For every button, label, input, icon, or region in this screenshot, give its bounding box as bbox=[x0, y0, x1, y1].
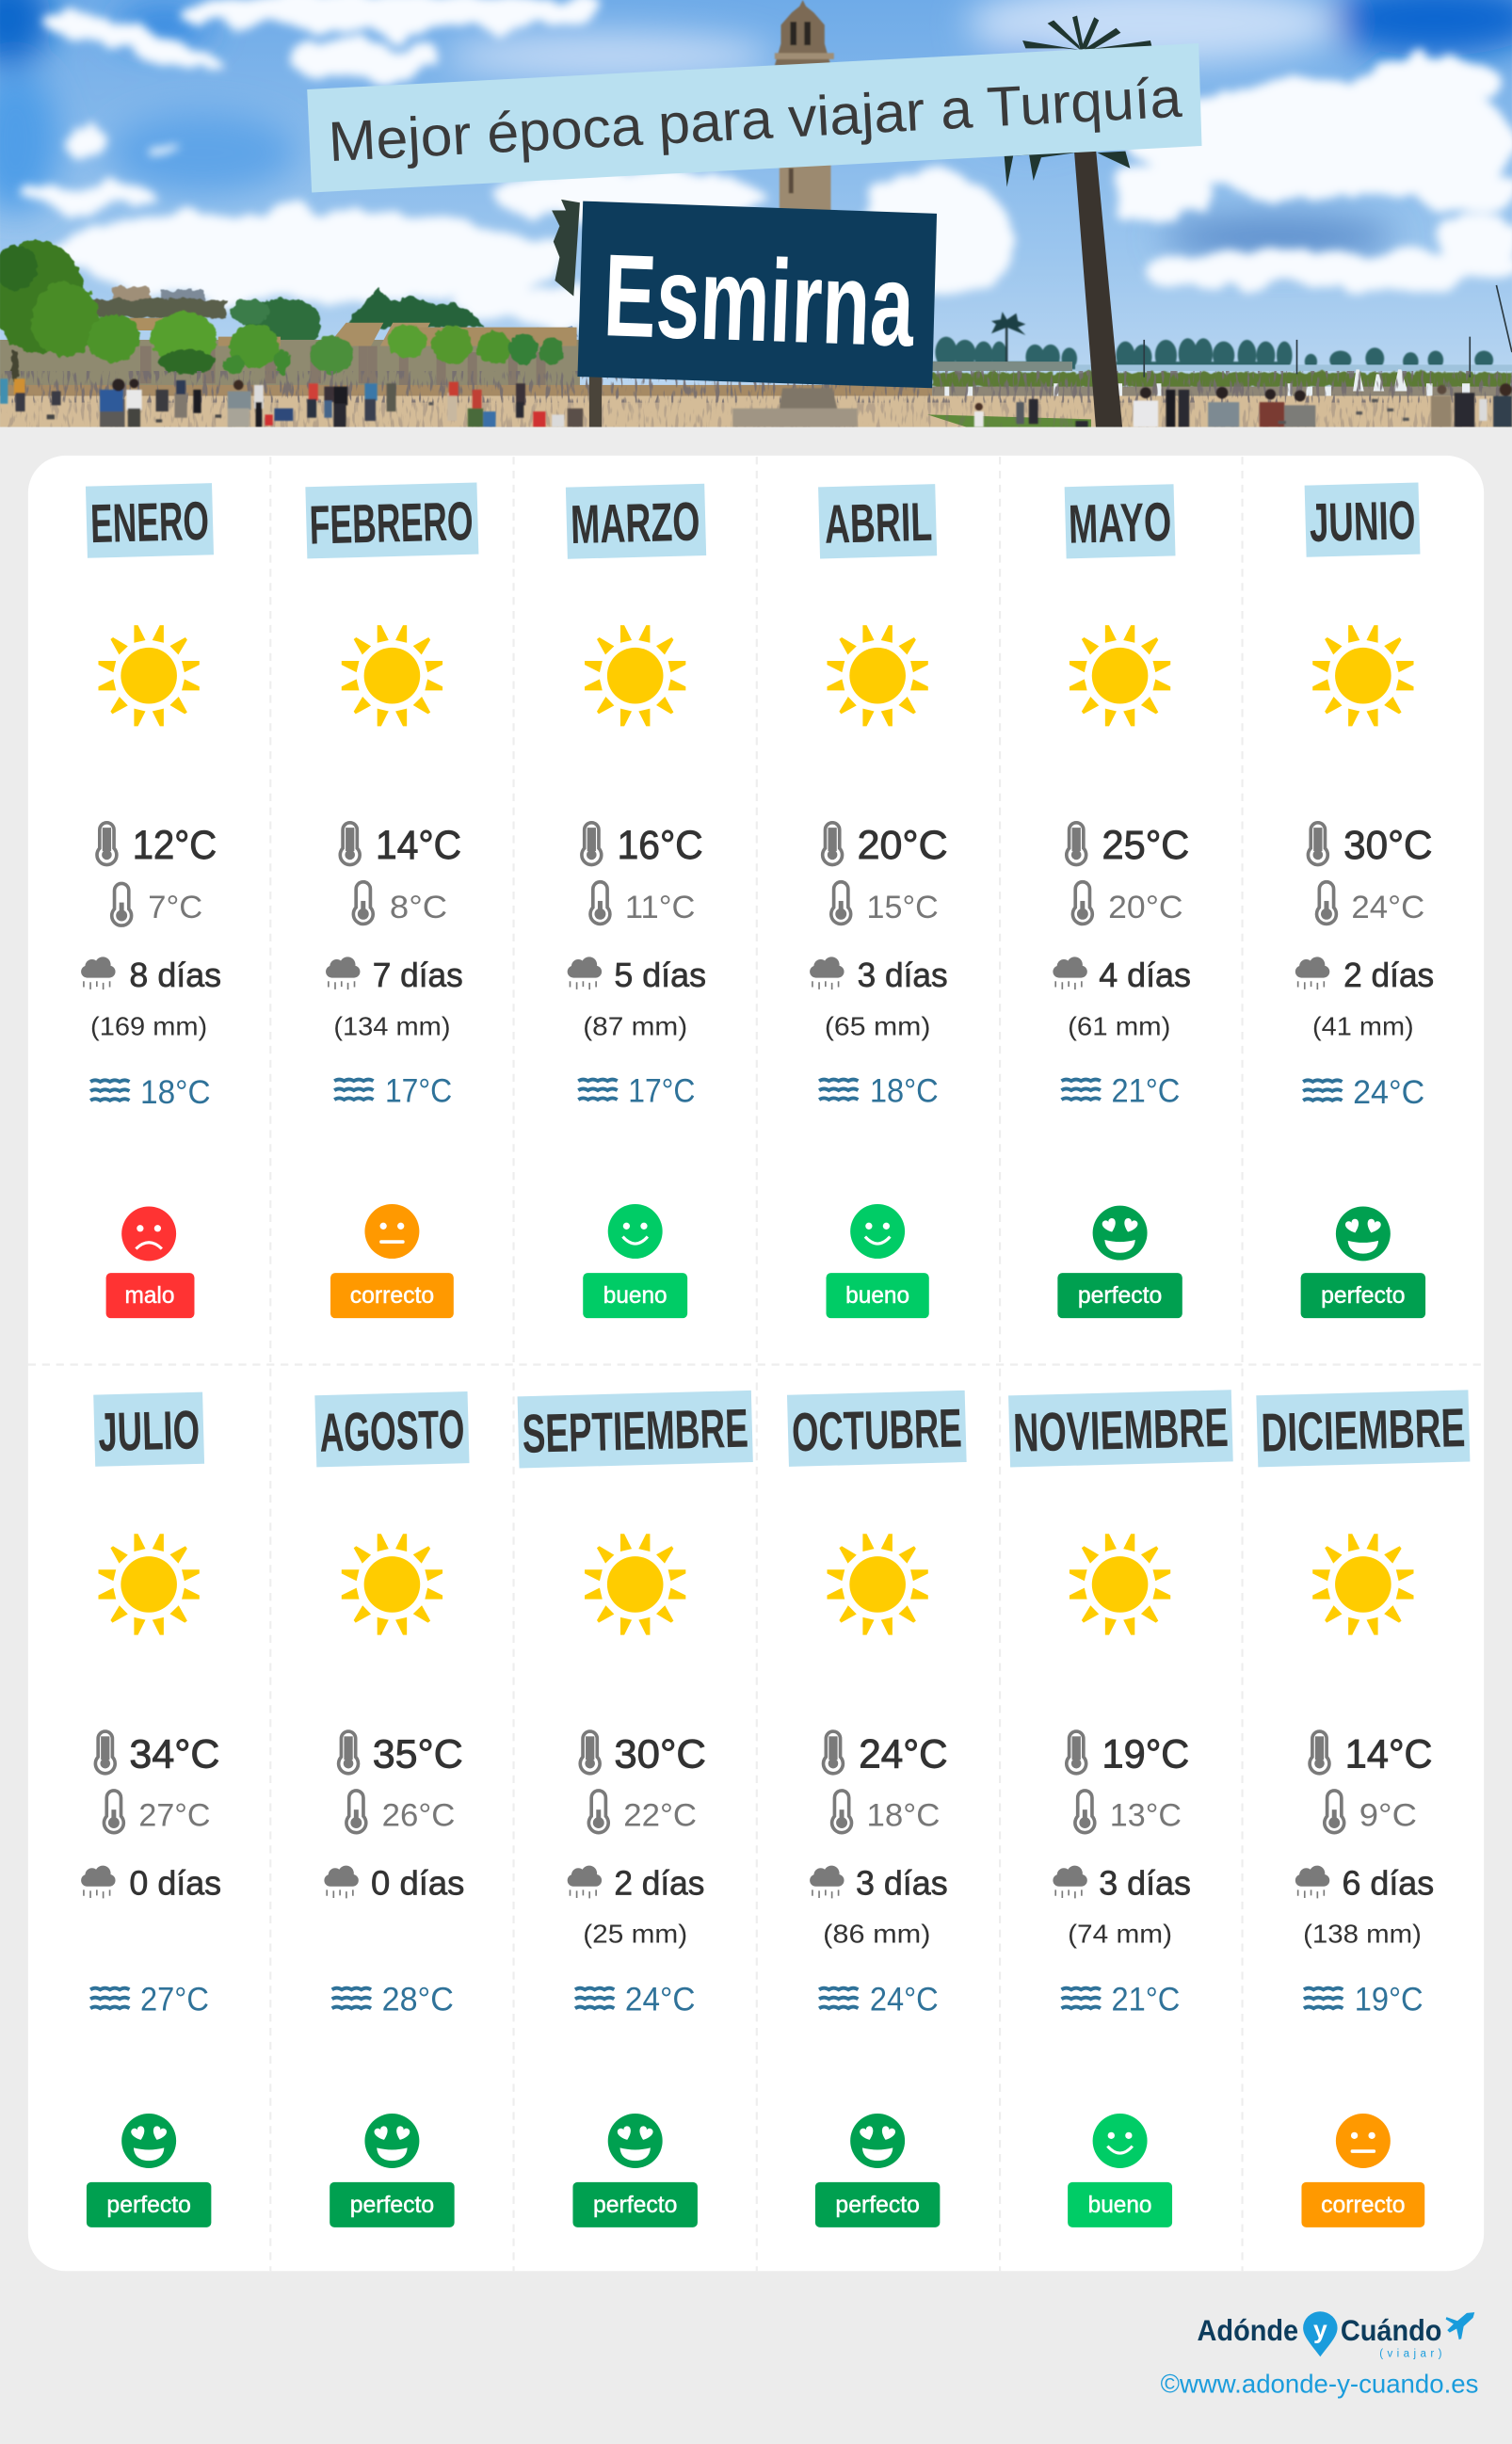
column: noviembre bbox=[1008, 1390, 1233, 2227]
rating: correcto: correcto bbox=[1321, 2193, 1406, 2218]
distant mountains bbox=[537, 326, 578, 337]
sea temperature bbox=[334, 1074, 452, 1110]
icon: sun bbox=[98, 1534, 200, 1635]
rating: correcto: correcto bbox=[350, 1283, 434, 1309]
column: octubre bbox=[787, 1391, 967, 2227]
sea temperature: 24°C bbox=[625, 1983, 695, 2018]
city ribbon bbox=[577, 201, 937, 388]
high temperature: 14°C bbox=[376, 823, 461, 867]
sea temperature bbox=[578, 1074, 695, 1110]
rating: perfecto bbox=[330, 2114, 455, 2227]
rating: bueno bbox=[827, 1204, 929, 1318]
sea temperature: 19°C bbox=[1355, 1983, 1424, 2018]
lamp posts bbox=[1144, 285, 1512, 378]
rainfall: (25 mm) bbox=[583, 1920, 687, 1949]
low temperature bbox=[1072, 882, 1183, 925]
rainfall: (86 mm) bbox=[823, 1920, 930, 1949]
low temperature: 7°C bbox=[148, 890, 202, 925]
column: abril bbox=[810, 484, 948, 1318]
logo: Adónde y Cuándo: Adónde bbox=[1198, 2314, 1298, 2347]
low temperature bbox=[832, 1791, 940, 1834]
title text: Mejor época para viajar a Turquía bbox=[327, 66, 1184, 173]
logo: Adónde y Cuándo: Cuándo bbox=[1341, 2314, 1441, 2347]
logo: Adónde y Cuándo: (viajar) bbox=[1379, 2348, 1442, 2359]
rainy days bbox=[81, 1863, 221, 1902]
month label: MARZO bbox=[570, 492, 700, 555]
low temperature: 24°C bbox=[1351, 890, 1424, 925]
city name: Esmirna bbox=[602, 231, 917, 372]
low temperature bbox=[588, 1791, 697, 1834]
low temperature bbox=[104, 1791, 211, 1834]
month label: ABRIL bbox=[824, 492, 933, 555]
rainy days bbox=[810, 1863, 948, 1902]
sea temperature: 24°C bbox=[870, 1983, 939, 2018]
low temperature bbox=[112, 883, 202, 925]
clouds bbox=[22, 0, 1512, 326]
month label: AGOSTO bbox=[319, 1400, 465, 1464]
rating: perfecto bbox=[1301, 1206, 1425, 1318]
people bbox=[0, 378, 1512, 427]
rainy days: 8 días bbox=[129, 956, 221, 994]
rainy days: 0 días bbox=[371, 1863, 464, 1902]
icon: sun bbox=[827, 625, 928, 726]
sea temperature bbox=[819, 1983, 939, 2018]
sea temperature bbox=[332, 1983, 454, 2018]
rating: bueno: bueno bbox=[1088, 2193, 1152, 2218]
month label bbox=[1065, 484, 1176, 558]
month label: JUNIO bbox=[1309, 490, 1416, 554]
rainfall: (138 mm) bbox=[1303, 1920, 1422, 1949]
sea temperature bbox=[1062, 1074, 1180, 1110]
high temperature: 35°C bbox=[373, 1731, 463, 1776]
sea temperature bbox=[90, 1075, 211, 1111]
column: diciembre bbox=[1256, 1390, 1470, 2227]
header photo: Izmir clock tower square bbox=[0, 0, 1512, 427]
rainy days bbox=[1053, 956, 1191, 994]
round trees bbox=[0, 240, 564, 382]
rating: perfecto bbox=[815, 2114, 940, 2227]
rating: correcto bbox=[330, 1204, 454, 1318]
sea temperature: 21°C bbox=[1111, 1983, 1180, 2018]
sea temperature: 21°C bbox=[1111, 1074, 1180, 1110]
month label bbox=[86, 483, 214, 558]
rainy days: 7 días bbox=[373, 956, 463, 994]
rainy days: 5 días bbox=[614, 956, 706, 994]
column: agosto bbox=[314, 1391, 470, 2227]
rainfall: (87 mm) bbox=[583, 1011, 687, 1040]
high temperature bbox=[1067, 1731, 1189, 1776]
month label bbox=[566, 484, 706, 559]
rating: perfecto: perfecto bbox=[1321, 1283, 1406, 1309]
low temperature: 9°C bbox=[1359, 1798, 1417, 1834]
month label: ENERO bbox=[89, 491, 210, 555]
low temperature bbox=[831, 882, 939, 925]
rainy days: 2 días bbox=[1343, 956, 1434, 994]
sea temperature: 17°C bbox=[385, 1074, 452, 1110]
rainy days bbox=[326, 956, 463, 994]
low temperature: 26°C bbox=[382, 1798, 455, 1834]
rainy days: 0 días bbox=[129, 1863, 221, 1902]
icon: sun bbox=[585, 1534, 685, 1635]
rainfall: (74 mm) bbox=[1068, 1920, 1172, 1949]
month label bbox=[787, 1391, 967, 1467]
high temperature bbox=[1310, 1731, 1433, 1776]
rainy days bbox=[1295, 1863, 1434, 1902]
icon: sun bbox=[1312, 1534, 1414, 1635]
rainfall: (41 mm) bbox=[1312, 1011, 1414, 1040]
high temperature: 24°C bbox=[859, 1731, 948, 1776]
high temperature bbox=[1067, 823, 1189, 867]
month label: SEPTIEMBRE bbox=[522, 1399, 749, 1465]
column: marzo bbox=[566, 484, 706, 1318]
low temperature bbox=[1317, 882, 1424, 925]
rating: correcto bbox=[1301, 2114, 1424, 2227]
month label bbox=[518, 1391, 753, 1469]
high temperature bbox=[340, 823, 461, 867]
month label bbox=[1008, 1390, 1233, 1468]
rainfall: (65 mm) bbox=[825, 1011, 930, 1040]
panel: monthly calendar bbox=[28, 456, 1484, 2271]
rainy days bbox=[324, 1863, 464, 1902]
rating: bueno: bueno bbox=[845, 1283, 909, 1309]
rainy days bbox=[568, 956, 706, 994]
right tree band and promenade bbox=[932, 312, 1493, 371]
rainy days: 3 días bbox=[1099, 1863, 1191, 1902]
rainy days: 4 días bbox=[1099, 956, 1191, 994]
icon: location pin bbox=[1303, 2311, 1338, 2356]
hill buildings and pines left bbox=[92, 284, 485, 340]
sea temperature bbox=[1303, 1075, 1424, 1111]
low temperature bbox=[590, 882, 695, 925]
rating: bueno: bueno bbox=[603, 1283, 668, 1309]
column: septiembre bbox=[518, 1391, 753, 2227]
title ribbon bbox=[307, 43, 1202, 192]
icon: sun bbox=[1070, 1534, 1170, 1635]
crowd specks bbox=[0, 371, 1512, 402]
rating: bueno bbox=[1068, 2114, 1172, 2227]
rainfall: (169 mm) bbox=[90, 1011, 207, 1040]
icon: location pin: y bbox=[1313, 2315, 1327, 2343]
sea temperature: 18°C bbox=[870, 1074, 939, 1110]
rating: malo bbox=[106, 1206, 194, 1318]
low temperature bbox=[346, 1791, 455, 1834]
high temperature: 30°C bbox=[1343, 823, 1433, 867]
low temperature: 8°C bbox=[390, 890, 447, 925]
rainy days: 6 días bbox=[1343, 1863, 1434, 1902]
month label bbox=[818, 484, 937, 558]
icon: sun bbox=[1312, 625, 1414, 726]
icon: sun bbox=[585, 625, 685, 726]
rating: malo: malo bbox=[124, 1283, 174, 1309]
sea temperature: 27°C bbox=[140, 1983, 209, 2018]
month label: MAYO bbox=[1068, 492, 1172, 555]
column: julio bbox=[81, 1392, 221, 2227]
rainy days: 2 días bbox=[614, 1863, 704, 1902]
sea temperature: 17°C bbox=[628, 1074, 695, 1110]
month label: FEBRERO bbox=[309, 491, 474, 556]
rating: perfecto bbox=[87, 2114, 211, 2227]
low temperature bbox=[1075, 1791, 1182, 1834]
icon: sun bbox=[342, 1534, 442, 1635]
sea temperature: 28°C bbox=[382, 1983, 454, 2018]
low temperature: 27°C bbox=[138, 1798, 211, 1834]
low temperature: 13°C bbox=[1110, 1798, 1182, 1834]
logo: Adónde y Cuándo bbox=[1198, 2311, 1474, 2359]
rainy days bbox=[810, 956, 948, 994]
high temperature bbox=[580, 1731, 706, 1776]
low temperature: 20°C bbox=[1108, 890, 1183, 925]
high temperature bbox=[97, 823, 217, 867]
rating: perfecto: perfecto bbox=[593, 2193, 677, 2218]
high temperature: 16°C bbox=[618, 823, 703, 867]
month label: NOVIEMBRE bbox=[1012, 1398, 1230, 1464]
rating: perfecto: perfecto bbox=[835, 2193, 920, 2218]
sea temperature: 24°C bbox=[1353, 1075, 1424, 1111]
rainy days: 3 días bbox=[858, 956, 948, 994]
high temperature: 14°C bbox=[1345, 1731, 1433, 1776]
column: junio bbox=[1295, 482, 1434, 1318]
rainy days bbox=[1053, 1863, 1191, 1902]
rainy days bbox=[568, 1863, 704, 1902]
month label: OCTUBRE bbox=[791, 1399, 962, 1463]
rainy days: 3 días bbox=[856, 1863, 948, 1902]
month label: JULIO bbox=[98, 1400, 201, 1463]
sea temperature bbox=[1304, 1983, 1424, 2018]
rainy days bbox=[81, 956, 221, 994]
sea temperature bbox=[1062, 1983, 1180, 2018]
park pergola bbox=[0, 318, 580, 387]
ground bbox=[0, 385, 932, 396]
high temperature: 19°C bbox=[1102, 1731, 1189, 1776]
high temperature: 30°C bbox=[614, 1731, 706, 1776]
high temperature: 12°C bbox=[133, 823, 217, 867]
icon: sun bbox=[342, 625, 442, 726]
sea temperature bbox=[575, 1983, 695, 2018]
high temperature: 34°C bbox=[129, 1731, 219, 1776]
low temperature bbox=[1325, 1791, 1417, 1834]
icon: sun bbox=[827, 1534, 928, 1635]
icon: sun bbox=[1070, 625, 1170, 726]
column: febrero bbox=[305, 483, 478, 1318]
low temperature: 15°C bbox=[867, 890, 939, 925]
sea temperature bbox=[90, 1983, 209, 2018]
low temperature: 22°C bbox=[623, 1798, 697, 1834]
sea temperature: 18°C bbox=[140, 1075, 211, 1111]
rainfall: (134 mm) bbox=[333, 1011, 450, 1040]
icon: plane bbox=[1446, 2312, 1474, 2339]
rainfall: (61 mm) bbox=[1068, 1011, 1170, 1040]
rating: perfecto: perfecto bbox=[106, 2193, 191, 2218]
low temperature bbox=[353, 882, 447, 925]
month label bbox=[314, 1391, 470, 1467]
sea temperature bbox=[819, 1074, 939, 1110]
palm trees bbox=[552, 16, 1152, 427]
month label bbox=[93, 1392, 204, 1467]
rating: bueno bbox=[583, 1204, 687, 1318]
rating: perfecto bbox=[1057, 1206, 1182, 1318]
high temperature bbox=[582, 823, 703, 867]
rating: perfecto: perfecto bbox=[350, 2193, 434, 2218]
rainy days bbox=[1295, 956, 1434, 994]
icon: sun bbox=[98, 625, 200, 726]
high temperature: 20°C bbox=[858, 823, 948, 867]
clock tower bbox=[732, 0, 858, 427]
rating: perfecto: perfecto bbox=[1078, 1283, 1162, 1309]
high temperature: 25°C bbox=[1102, 823, 1189, 867]
column: mayo bbox=[1053, 484, 1191, 1318]
month label bbox=[305, 483, 478, 558]
column: enero bbox=[81, 483, 221, 1318]
low temperature: 18°C bbox=[867, 1798, 940, 1834]
low temperature: 11°C bbox=[625, 890, 695, 925]
source url: ©www.adonde-y-cuando.es bbox=[1161, 2369, 1478, 2398]
month label bbox=[1305, 482, 1420, 557]
rating: perfecto bbox=[572, 2114, 698, 2227]
